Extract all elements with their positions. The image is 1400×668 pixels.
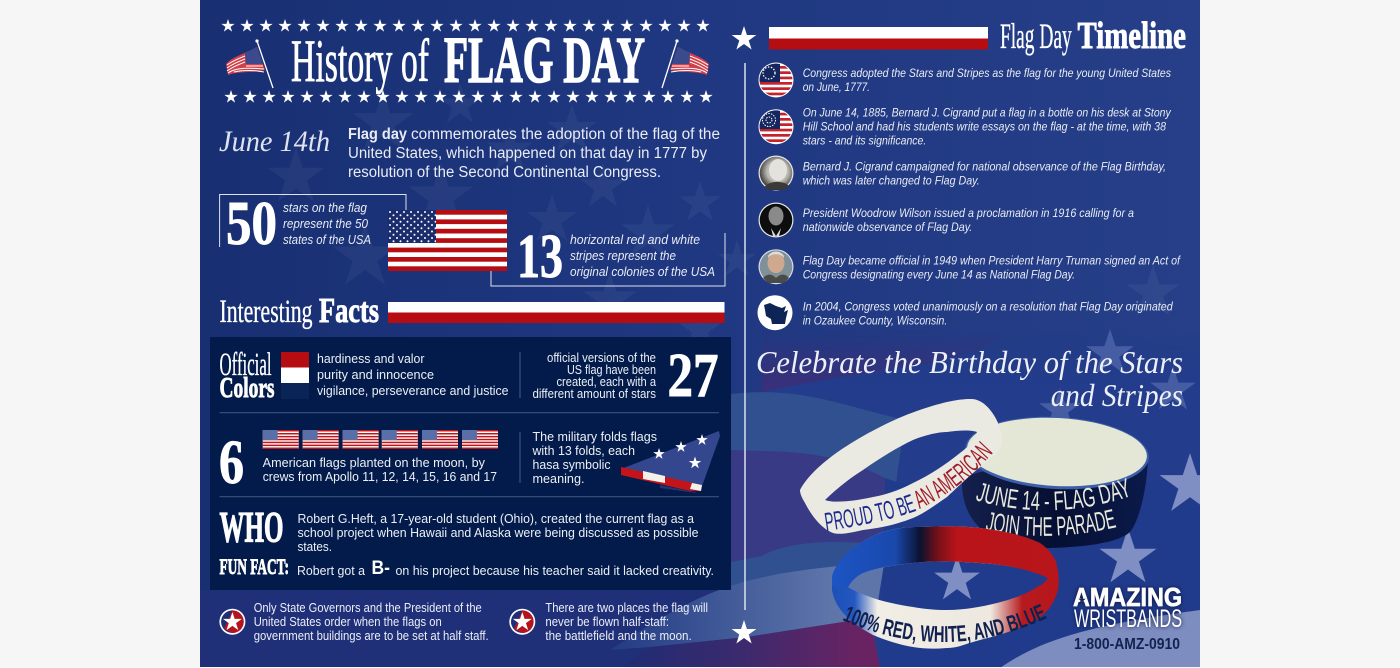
title [291, 24, 645, 97]
color meanings: vigilance, perseverance and justice [317, 384, 509, 398]
icon: folded flag [621, 431, 720, 493]
color meanings: purity and innocence [317, 368, 434, 382]
logo: Amazing Wristbands: AMAZING [1073, 582, 1182, 612]
timeline event 3 [758, 156, 1166, 190]
stat: 6: 6 [219, 429, 244, 497]
color swatch [281, 352, 309, 399]
headline: celebrate: and Stripes [1051, 377, 1183, 413]
timeline heading: Timeline [1078, 15, 1186, 57]
timeline event 6: In 2004, Congress voted unanimously on a resolution that Flag Day originated [803, 300, 1173, 313]
logo: Amazing Wristbands: WRISTBANDS [1074, 605, 1182, 633]
timeline event 5: Congress designating every June 14 as National Flag Day. [803, 268, 1075, 281]
stat: 50 stars: stars on the flag [283, 200, 368, 215]
wristband: navy: JUNE 14 - FLAG DAY [976, 478, 1128, 510]
fun fact [220, 554, 714, 579]
half staff note 1 [254, 601, 489, 643]
background [200, 0, 1220, 668]
military folds text [532, 430, 657, 486]
WHO heading: WHO [220, 504, 284, 552]
military folds text: The military folds flags [532, 430, 657, 444]
stat: 13 stripes [491, 223, 725, 291]
stat: 13 stripes: horizontal red and white [570, 232, 700, 247]
stat: 13 stripes: stripes represent the [570, 248, 676, 263]
wristband: navy: JOIN THE PARADE [986, 509, 1116, 536]
timeline event 1: Congress adopted the Stars and Stripes as the flag for the young United States [803, 67, 1171, 80]
half staff note 2: There are two places the flag will [545, 601, 708, 615]
color meanings: hardiness and valor [317, 352, 424, 366]
color meanings [317, 352, 509, 398]
intro paragraph: commemorates the adoption of the flag of the [411, 126, 720, 143]
fun fact: FUN FACT: [220, 554, 289, 579]
headline: celebrate [756, 344, 1183, 413]
timeline event 6: in Ozaukee County, Wisconsin. [803, 314, 947, 327]
WHO text: Robert G.Heft, a 17-year-old student (Ohio), created the current flag as a [298, 512, 694, 526]
timeline event 2: On June 14, 1885, Bernard J. Cigrand put a flag in a bottle on his desk at Stony [803, 106, 1172, 119]
logo: Amazing Wristbands: 1-800-AMZ-0910 [1074, 636, 1180, 653]
timeline event 2: Hill School and had his students write essays on the flag - at the time, with 38 [803, 120, 1166, 133]
icon: star badge 2 [509, 609, 535, 635]
timeline event 1: on June, 1777. [803, 81, 870, 94]
moon flags text: crews from Apollo 11, 12, 14, 15, 16 and 17 [263, 470, 497, 484]
timeline event 4: nationwide observance of Flag Day. [803, 221, 972, 234]
military folds text: meaning. [532, 472, 584, 486]
half staff note 1: Only State Governors and the President of the [254, 601, 482, 615]
timeline event 5 [758, 249, 1182, 284]
icon: star badge 1 [219, 609, 245, 635]
stat: 13 stripes: 13 [517, 223, 563, 291]
wristband: navy [962, 416, 1149, 548]
timeline heading: Flag Day [1000, 16, 1072, 56]
icon: US flag [388, 210, 507, 271]
heading: Interesting Facts: Interesting [220, 294, 312, 330]
intro paragraph: resolution of the Second Continental Congress. [348, 164, 661, 181]
date: June 14th: June 14th [219, 125, 330, 158]
icon: left waving flag [226, 39, 273, 88]
fun fact: Robert got a [297, 564, 365, 578]
moon flags text [263, 456, 497, 484]
intro paragraph: United States, which happened on that day in 1777 by [348, 145, 707, 162]
timeline event 1 [758, 62, 1171, 98]
timeline heading [732, 15, 1186, 57]
stat: 50 stars: 50 [226, 190, 277, 258]
official versions text: different amount of stars [532, 387, 656, 401]
half staff note 1: government buildings are to be set at half staff. [254, 629, 489, 643]
timeline event 4 [758, 202, 1134, 238]
half staff note 2: never be flown half-staff: [545, 615, 669, 629]
official colors heading: Official [220, 347, 272, 383]
WHO text: school project when Hawaii and Alaska were being discussed as possible [298, 526, 699, 540]
timeline event 3: Bernard J. Cigrand campaigned for national observance of the Flag Birthday, [803, 160, 1166, 173]
official versions text [532, 351, 656, 401]
timeline event 2 [758, 106, 1172, 147]
intro paragraph: Flag day [348, 126, 407, 143]
half staff note 1: United States order when the flags on [254, 615, 442, 629]
timeline event 3: which was later changed to Flag Day. [803, 174, 980, 187]
six mini flags [263, 430, 498, 449]
panel: interesting facts [210, 337, 731, 590]
official colors heading: Colors [220, 372, 274, 404]
half staff note 2: the battlefield and the moon. [545, 629, 692, 643]
timeline event 5: Flag Day became official in 1949 when President Harry Truman signed an Act of [803, 254, 1182, 267]
wristband: white: PROUD TO BE AN AMERICAN [824, 441, 993, 531]
icon: right waving flag [662, 39, 709, 88]
stat: 27: 27 [668, 342, 718, 410]
WHO text: states. [298, 540, 332, 554]
stat: 50 stars [220, 190, 406, 258]
wristband: tricolor: 100% RED, WHITE, AND BLUE [842, 604, 1047, 644]
wristband: white [800, 399, 1002, 534]
official versions text: created, each with a [556, 375, 656, 389]
official versions text: official versions of the [547, 351, 656, 365]
intro paragraph [348, 126, 720, 181]
official versions text: US flag have been [567, 363, 656, 377]
official colors heading [220, 347, 274, 404]
title: FLAG DAY [444, 24, 645, 97]
timeline event 6 [758, 295, 1173, 330]
military folds text: with 13 folds, each [532, 444, 635, 458]
stat: 13 stripes: original colonies of the USA [570, 264, 715, 279]
title: History of [291, 28, 429, 94]
heading: Interesting Facts: Facts [319, 291, 379, 330]
timeline axis [732, 63, 756, 644]
title star rows [221, 19, 713, 103]
stat: 50 stars: represent the 50 [283, 216, 369, 231]
WHO text [298, 512, 699, 554]
half staff note 2 [545, 601, 708, 643]
military folds text: hasa symbolic [532, 458, 610, 472]
fun fact: on his project because his teacher said it lacked creativity. [396, 564, 714, 578]
timeline event 2: stars - and its significance. [803, 134, 926, 147]
timeline event 4: President Woodrow Wilson issued a proclamation in 1916 calling for a [803, 207, 1134, 220]
logo: Amazing Wristbands [1073, 582, 1182, 653]
moon flags text: American flags planted on the moon, by [263, 456, 486, 470]
headline: celebrate: Celebrate the Birthday of the Stars [756, 344, 1183, 380]
wristband: tricolor [832, 526, 1059, 649]
heading: Interesting Facts [220, 291, 724, 330]
fun fact: B- [372, 558, 390, 579]
stat: 50 stars: states of the USA [283, 232, 371, 247]
